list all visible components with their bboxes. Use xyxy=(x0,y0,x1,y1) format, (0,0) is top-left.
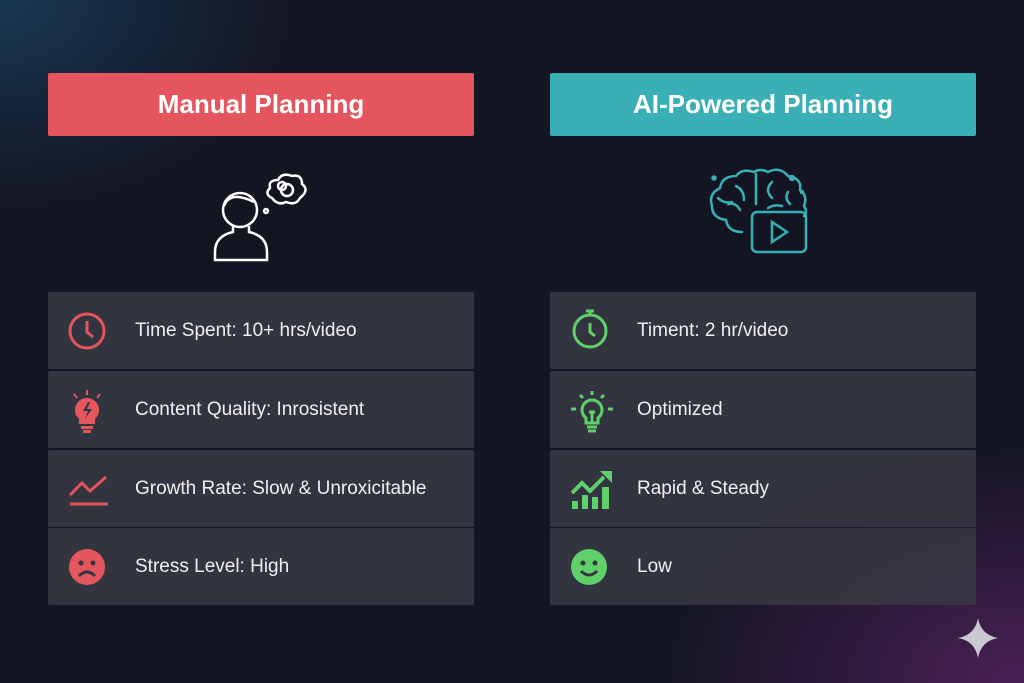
header: manual planning xyxy=(48,73,474,136)
row: growth rate: Growth Rate: Slow & Unroxicitable xyxy=(135,478,426,499)
row: low stress: Low xyxy=(637,556,672,577)
row: stress level xyxy=(48,528,474,605)
row: time spent xyxy=(48,292,474,369)
header: AI-powered planning: AI-Powered Planning xyxy=(633,89,893,119)
icon: brain with video xyxy=(710,168,808,254)
row: rapid & steady xyxy=(550,450,976,527)
row: stress level: Stress Level: High xyxy=(135,556,289,577)
row: time: Timent: 2 hr/video xyxy=(637,320,788,341)
row: content quality: Content Quality: Inrosistent xyxy=(135,399,364,420)
row: rapid & steady: Rapid & Steady xyxy=(637,478,769,499)
row: growth rate xyxy=(48,450,474,527)
header: AI-powered planning xyxy=(550,73,976,136)
row: optimized: Optimized xyxy=(637,399,723,420)
row: optimized xyxy=(550,371,976,448)
row: low stress xyxy=(550,528,976,605)
row: time xyxy=(550,292,976,369)
row: time spent: Time Spent: 10+ hrs/video xyxy=(135,320,357,341)
panel: AI xyxy=(550,292,976,605)
icon: person thinking xyxy=(214,173,307,262)
panel: manual xyxy=(48,292,474,605)
header: manual planning: Manual Planning xyxy=(158,89,364,119)
row: content quality xyxy=(48,371,474,448)
icon: sparkle xyxy=(958,618,998,658)
